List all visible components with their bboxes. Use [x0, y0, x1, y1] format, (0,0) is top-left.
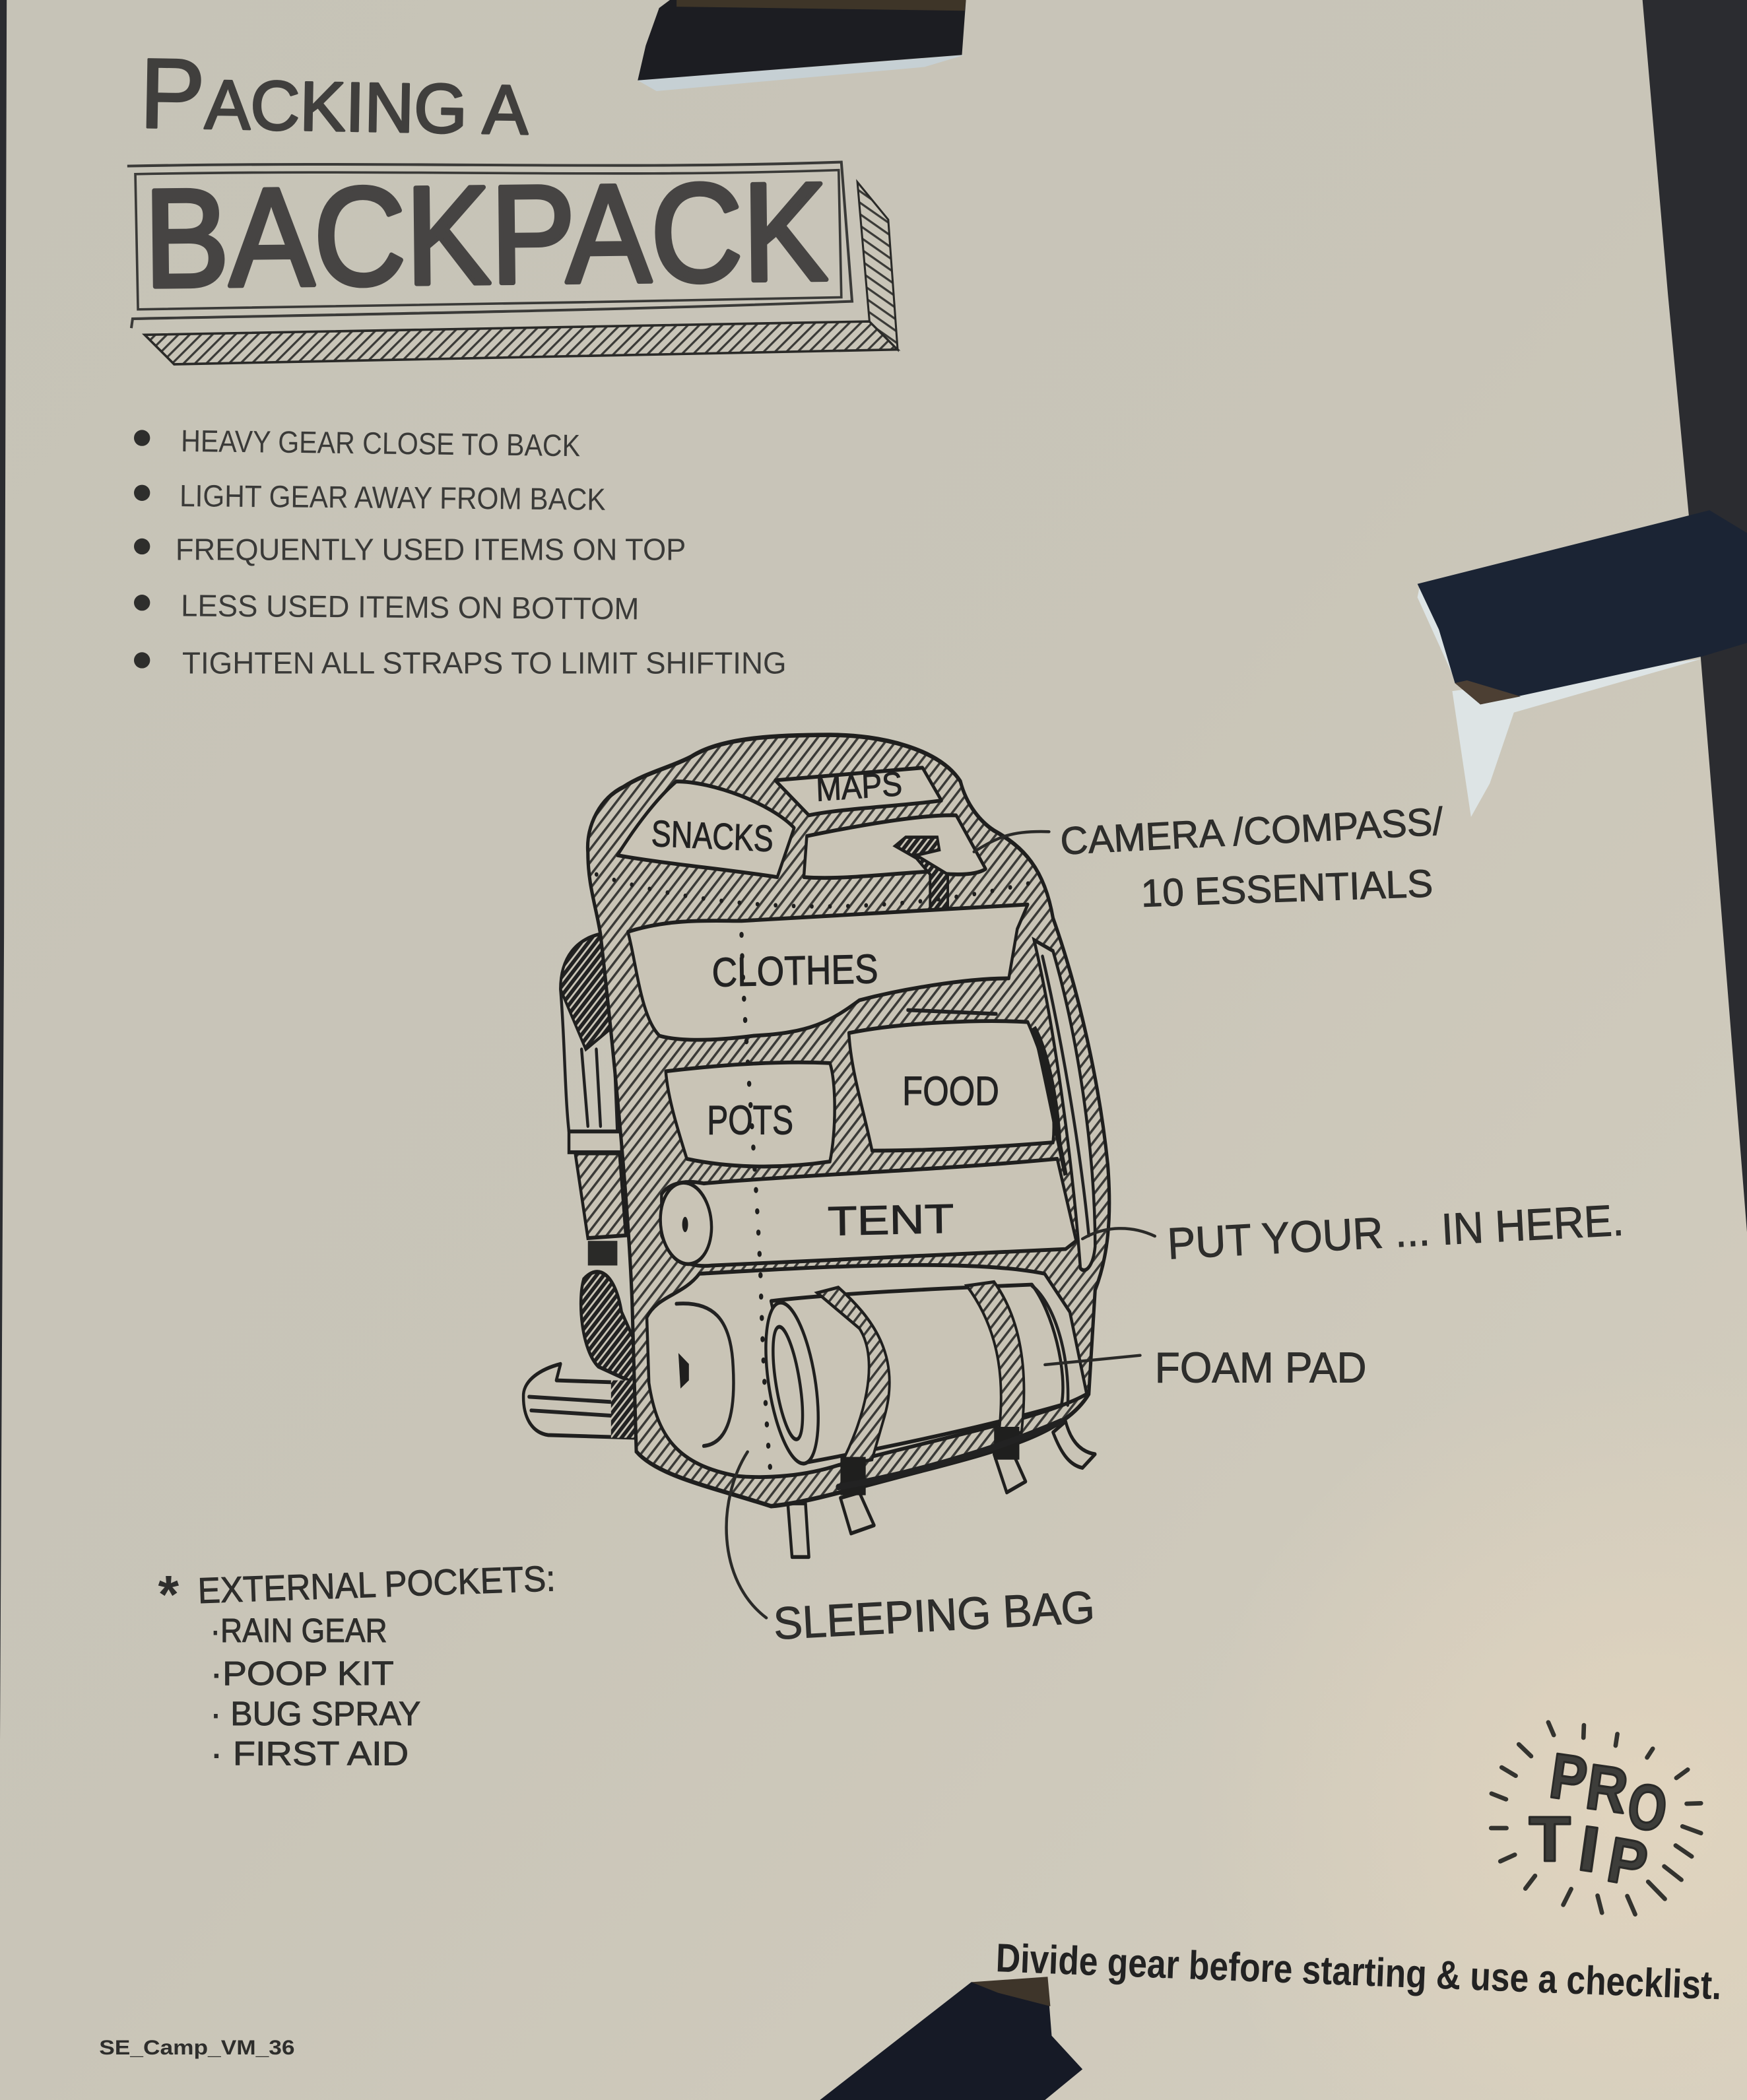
pocket: clothes: CLOTHES	[711, 946, 878, 995]
badge word: pro: P	[1546, 1740, 1591, 1816]
page code: SE_Camp_VM_36	[99, 2036, 295, 2059]
note: external pockets	[158, 1558, 556, 1773]
pocket: maps	[775, 765, 941, 815]
bottom straps	[788, 1422, 1095, 1557]
pocket: snacks	[617, 781, 794, 877]
pocket: food	[849, 1010, 1054, 1150]
pocket: sleeping bag	[647, 1265, 1087, 1477]
badge: pro tip	[1491, 1723, 1701, 1915]
bullet list: HEAVY GEAR CLOSE TO BACK	[181, 424, 580, 463]
illustration: backpack	[523, 735, 1109, 1557]
callout: camera compass 10 essentials: CAMERA /COMPASS/	[1059, 800, 1445, 863]
callout: sleeping bag	[727, 1452, 1096, 1649]
pocket: pots	[666, 1063, 835, 1167]
note: external pockets: · BUG SPRAY	[211, 1695, 420, 1732]
title: packing a: PACKING A	[139, 38, 530, 155]
bullet list: TIGHTEN ALL STRAPS TO LIMIT SHIFTING	[182, 646, 787, 680]
callout: sleeping bag: SLEEPING BAG	[772, 1582, 1096, 1649]
top dotted seam	[597, 874, 1032, 906]
banner shadow band	[145, 321, 898, 364]
tape: bottom	[820, 1977, 1082, 2100]
badge word: pro: O	[1624, 1770, 1671, 1845]
tape: right shadow	[1418, 584, 1701, 817]
center dotted seam	[742, 935, 771, 1476]
note: external pockets: ·RAIN GEAR	[211, 1612, 387, 1649]
side pocket	[1034, 940, 1095, 1270]
pocket: camera	[804, 815, 985, 918]
pocket: food: FOOD	[902, 1068, 999, 1114]
pack body	[587, 735, 1109, 1506]
tape: right	[1418, 510, 1747, 704]
banner word: BACKPACK	[143, 153, 828, 316]
foam pad	[756, 1282, 1068, 1495]
left shoulder strap	[560, 935, 636, 1383]
bullet list: LIGHT GEAR AWAY FROM BACK	[180, 478, 606, 517]
badge word: pro: R	[1582, 1752, 1632, 1827]
pocket: clothes	[628, 905, 1028, 1040]
hip belt	[523, 1364, 636, 1438]
badge rays	[1491, 1723, 1701, 1915]
banner side hatch	[857, 182, 898, 350]
title banner: backpack	[127, 153, 898, 364]
callout: camera compass 10 essentials	[974, 800, 1445, 915]
badge word: tip: I	[1574, 1813, 1604, 1886]
pocket: tent	[655, 1159, 1076, 1270]
banner frame	[127, 162, 852, 328]
pocket: maps: MAPS	[815, 765, 903, 808]
badge word: pro	[1546, 1740, 1671, 1845]
badge word: tip: T	[1529, 1804, 1571, 1875]
tape: top shadow	[638, 55, 965, 91]
pocket: tent: TENT	[828, 1196, 954, 1244]
callout: camera compass 10 essentials: 10 ESSENTIALS	[1140, 862, 1434, 915]
bullet list	[134, 424, 787, 680]
pocket: pots: POTS	[707, 1098, 793, 1143]
tape: top	[638, 0, 966, 81]
callout: put your in here: PUT YOUR ... IN HERE.	[1166, 1195, 1625, 1269]
bullet list: LESS USED ITEMS ON BOTTOM	[181, 589, 640, 626]
note: external pockets: · FIRST AID	[211, 1735, 409, 1773]
note: external pockets: *	[158, 1565, 180, 1624]
callout: foam pad	[1045, 1343, 1367, 1391]
pocket: snacks: SNACKS	[651, 812, 774, 860]
badge word: tip: P	[1602, 1824, 1653, 1901]
badge word: tip	[1529, 1804, 1653, 1901]
note: external pockets: EXTERNAL POCKETS:	[197, 1558, 556, 1611]
bullet list: FREQUENTLY USED ITEMS ON TOP	[176, 532, 686, 566]
callout: foam pad: FOAM PAD	[1155, 1343, 1367, 1391]
note: external pockets: ·POOP KIT	[211, 1655, 394, 1692]
